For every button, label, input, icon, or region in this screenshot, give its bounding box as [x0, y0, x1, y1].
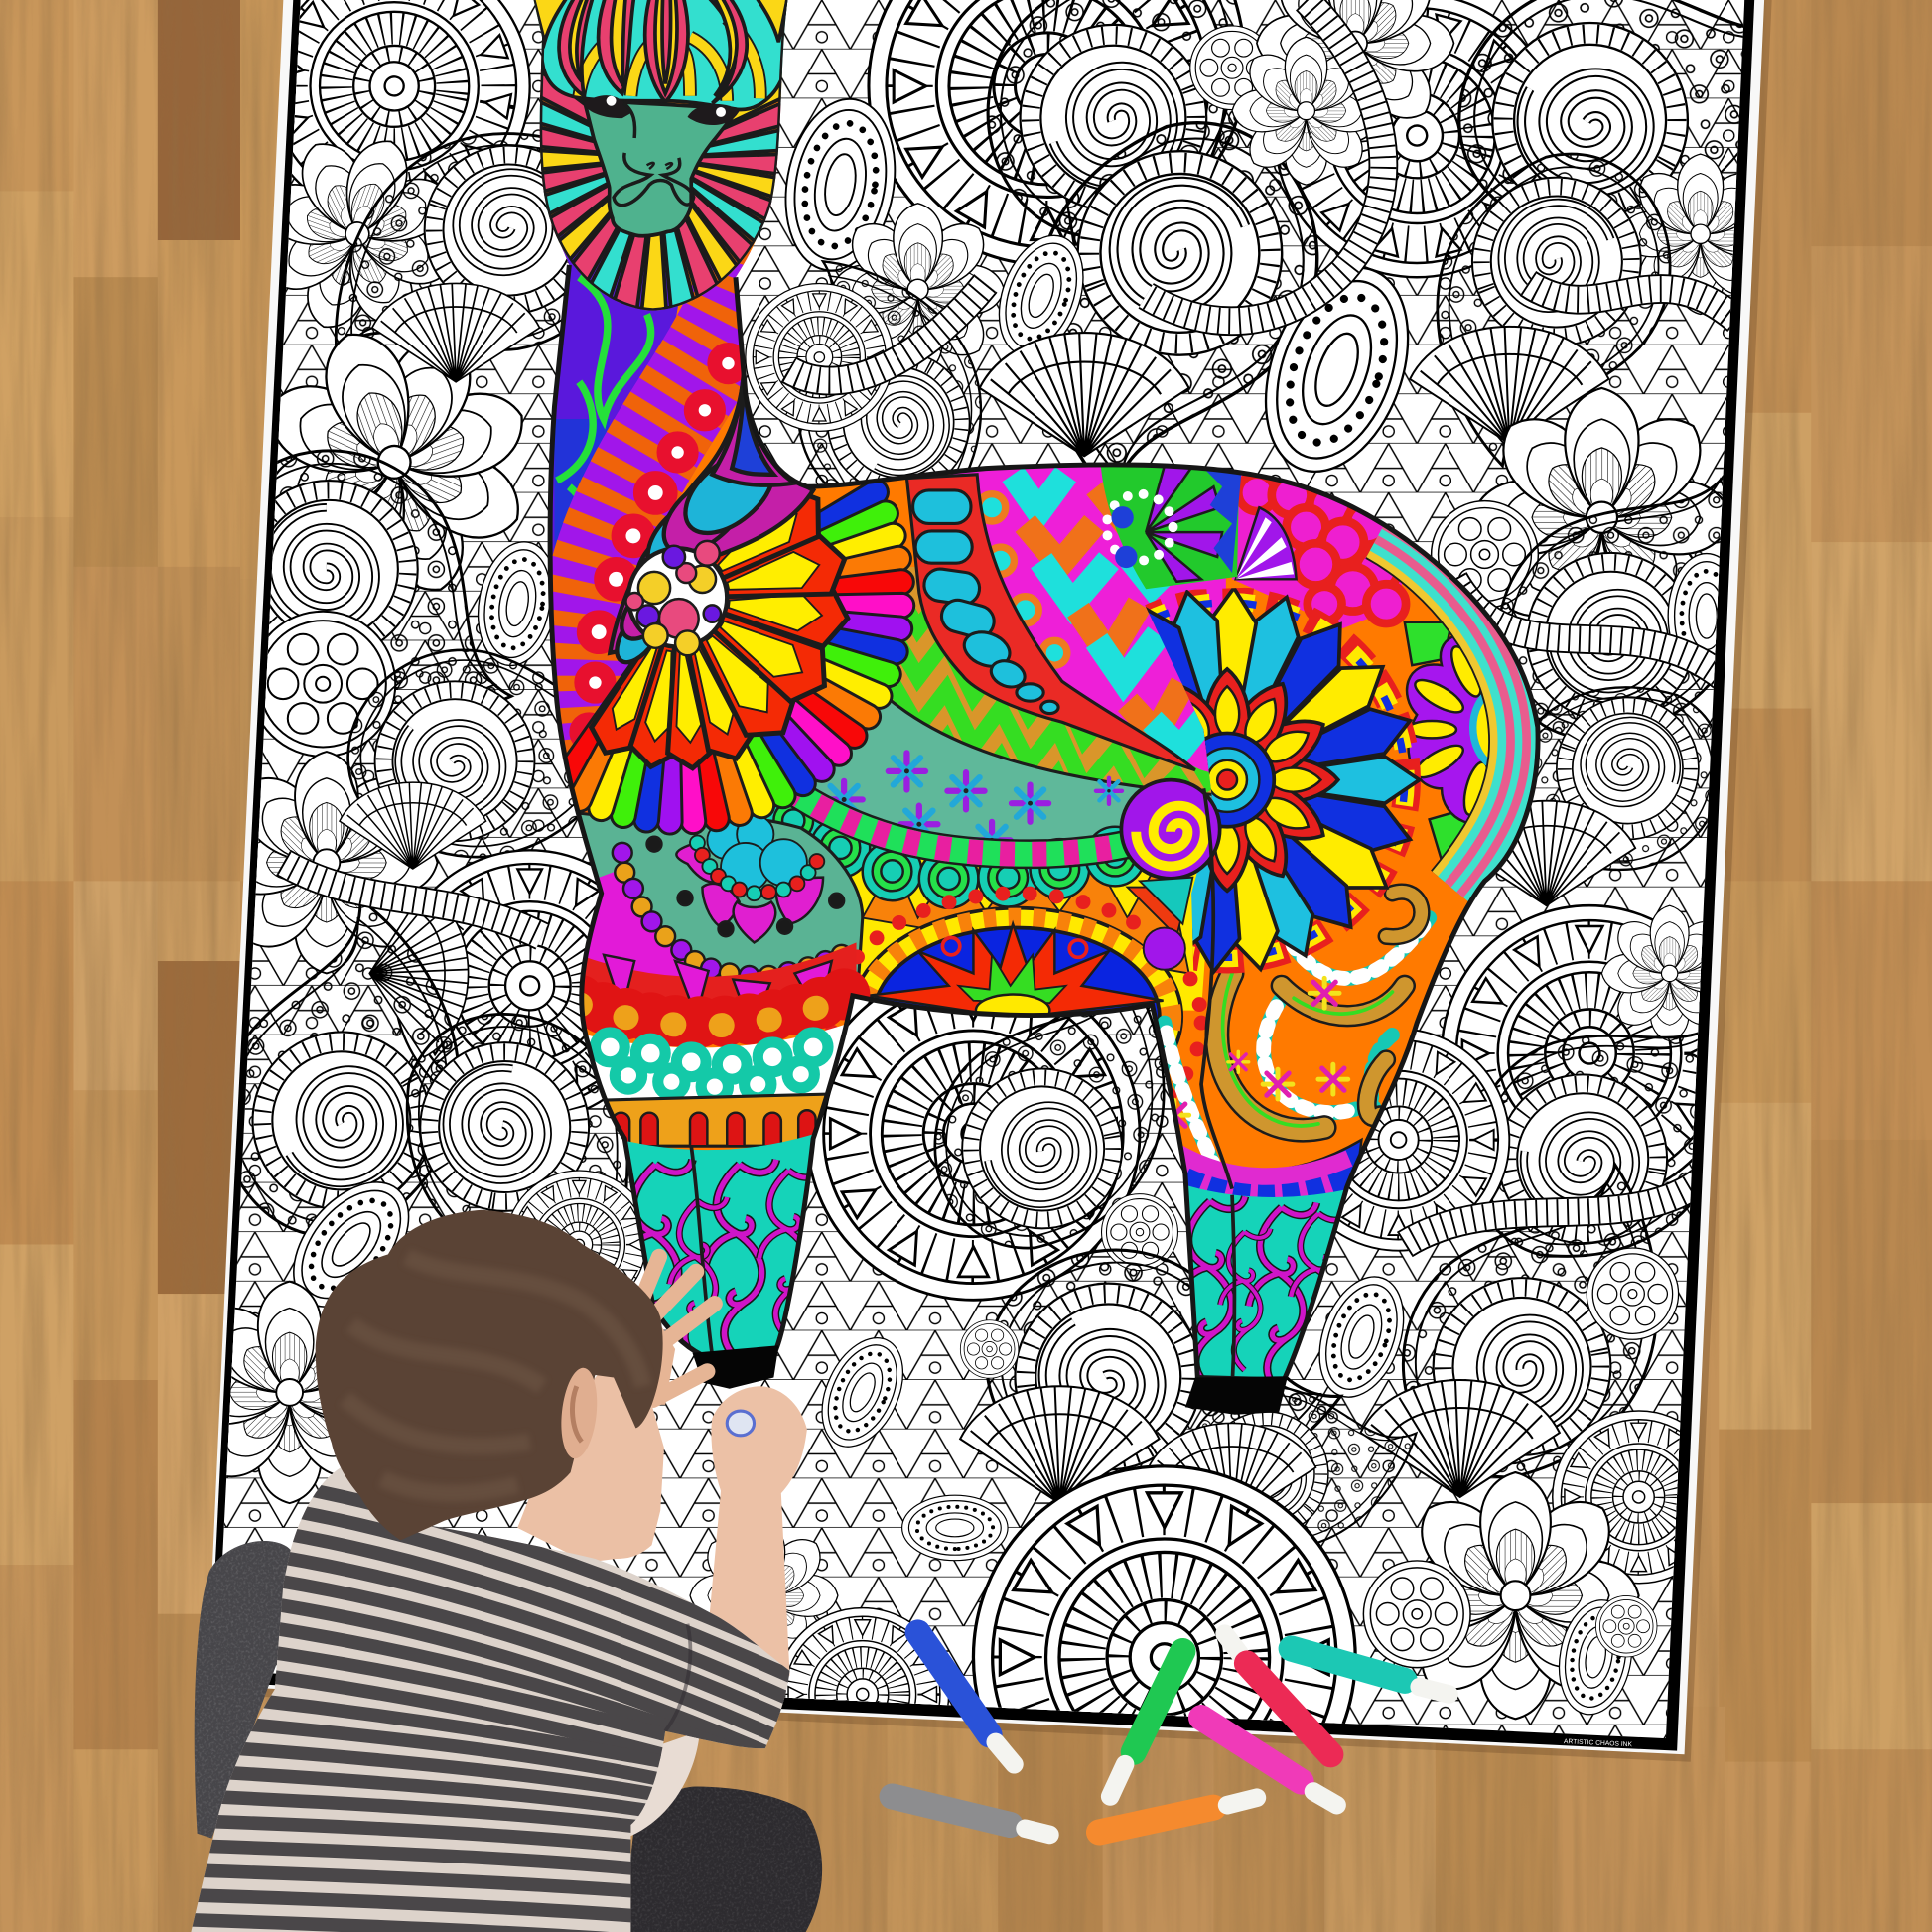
front leg orange scallops	[597, 1094, 828, 1146]
llama	[534, 0, 1541, 1415]
marker: grey	[893, 1796, 1049, 1835]
markers	[893, 1632, 1449, 1835]
neck horn scales	[608, 367, 813, 670]
hind leg swirls	[1165, 892, 1430, 1165]
neck striped band	[585, 252, 755, 838]
front leg hearts band	[579, 942, 857, 1036]
hind hooves	[1185, 1376, 1288, 1415]
llama head	[472, 0, 842, 343]
face	[584, 100, 738, 236]
neck vine panel	[552, 234, 685, 556]
boy: striped shirt	[173, 1442, 813, 1932]
poster line-art paisley background	[222, 0, 1745, 1739]
red band with cyan ovals	[906, 475, 1195, 770]
tick-marked ribbons	[283, 0, 1737, 1244]
hind magenta scallop band	[1165, 1140, 1361, 1201]
boy: neck and face	[517, 1368, 664, 1563]
head mane stripes	[472, 48, 842, 343]
front leg teal scallops	[587, 1023, 850, 1103]
top saddle mandala	[1100, 459, 1242, 589]
marker: magenta	[1201, 1718, 1337, 1805]
muzzle lines	[614, 103, 694, 206]
half sun mandala	[832, 894, 1201, 1152]
boy: hair highlights	[345, 1257, 643, 1493]
mandala bead arc	[690, 835, 824, 900]
sunburst rays under belly	[852, 860, 1205, 1011]
neck scallops	[574, 349, 742, 792]
shoulder dot circle	[625, 541, 727, 655]
rainbow scallop ring	[1047, 600, 1407, 960]
dotted swirl borders	[1165, 918, 1430, 1165]
marker: green	[1110, 1651, 1182, 1796]
scallop row	[766, 807, 1142, 909]
boy: hair	[316, 1210, 663, 1540]
hind lower legs	[1171, 1180, 1355, 1395]
front lower legs	[617, 1131, 823, 1361]
bead band	[788, 788, 1213, 854]
rump stripes	[1380, 532, 1519, 890]
boy	[173, 1210, 822, 1932]
marker: blue	[918, 1632, 1014, 1764]
hind inner lines	[1201, 788, 1232, 1189]
marker: teal	[1292, 1649, 1449, 1694]
marker: orange	[1099, 1798, 1257, 1832]
boy: grey trouser knee	[195, 1541, 291, 1839]
chest curls	[707, 816, 807, 893]
zigzag panel	[891, 566, 1211, 793]
small hind flowers	[1160, 978, 1348, 1130]
front leg orange drops	[579, 992, 850, 1026]
red scallop panel	[1226, 469, 1478, 690]
forelock arcs	[579, 19, 760, 101]
poster brand label: ARTISTIC CHAOS INK	[1564, 1738, 1633, 1748]
chest beads	[613, 843, 852, 986]
boy: dark trouser leg	[622, 1787, 822, 1932]
boy: ear	[557, 1366, 601, 1460]
shoulder feather fan	[542, 475, 914, 834]
boy: marker in hand	[727, 1411, 755, 1436]
big flower	[1047, 587, 1420, 973]
forelock drops	[532, 0, 788, 103]
boy: drawing arm	[709, 1386, 807, 1676]
llama body colour fields	[534, 0, 1536, 1377]
llama outline	[550, 265, 1538, 1380]
head outline	[540, 0, 788, 311]
front hooves	[692, 1345, 778, 1389]
poster sheet	[207, 0, 1772, 1762]
eyes	[583, 95, 740, 125]
boy: raised hand fingers	[634, 1257, 715, 1405]
magenta chevron panel	[950, 467, 1226, 772]
forelock backing	[530, 0, 794, 110]
boy: undershirt patch	[628, 1731, 700, 1836]
chest mandala	[647, 837, 844, 942]
purple hip flower	[1407, 633, 1509, 825]
green flower panel	[816, 699, 1212, 849]
red and teal rays under spiral	[1128, 878, 1192, 970]
chest panel	[580, 812, 864, 977]
marker: red	[1225, 1634, 1330, 1754]
purple spiral	[1121, 780, 1220, 879]
green leaves	[1405, 622, 1472, 869]
